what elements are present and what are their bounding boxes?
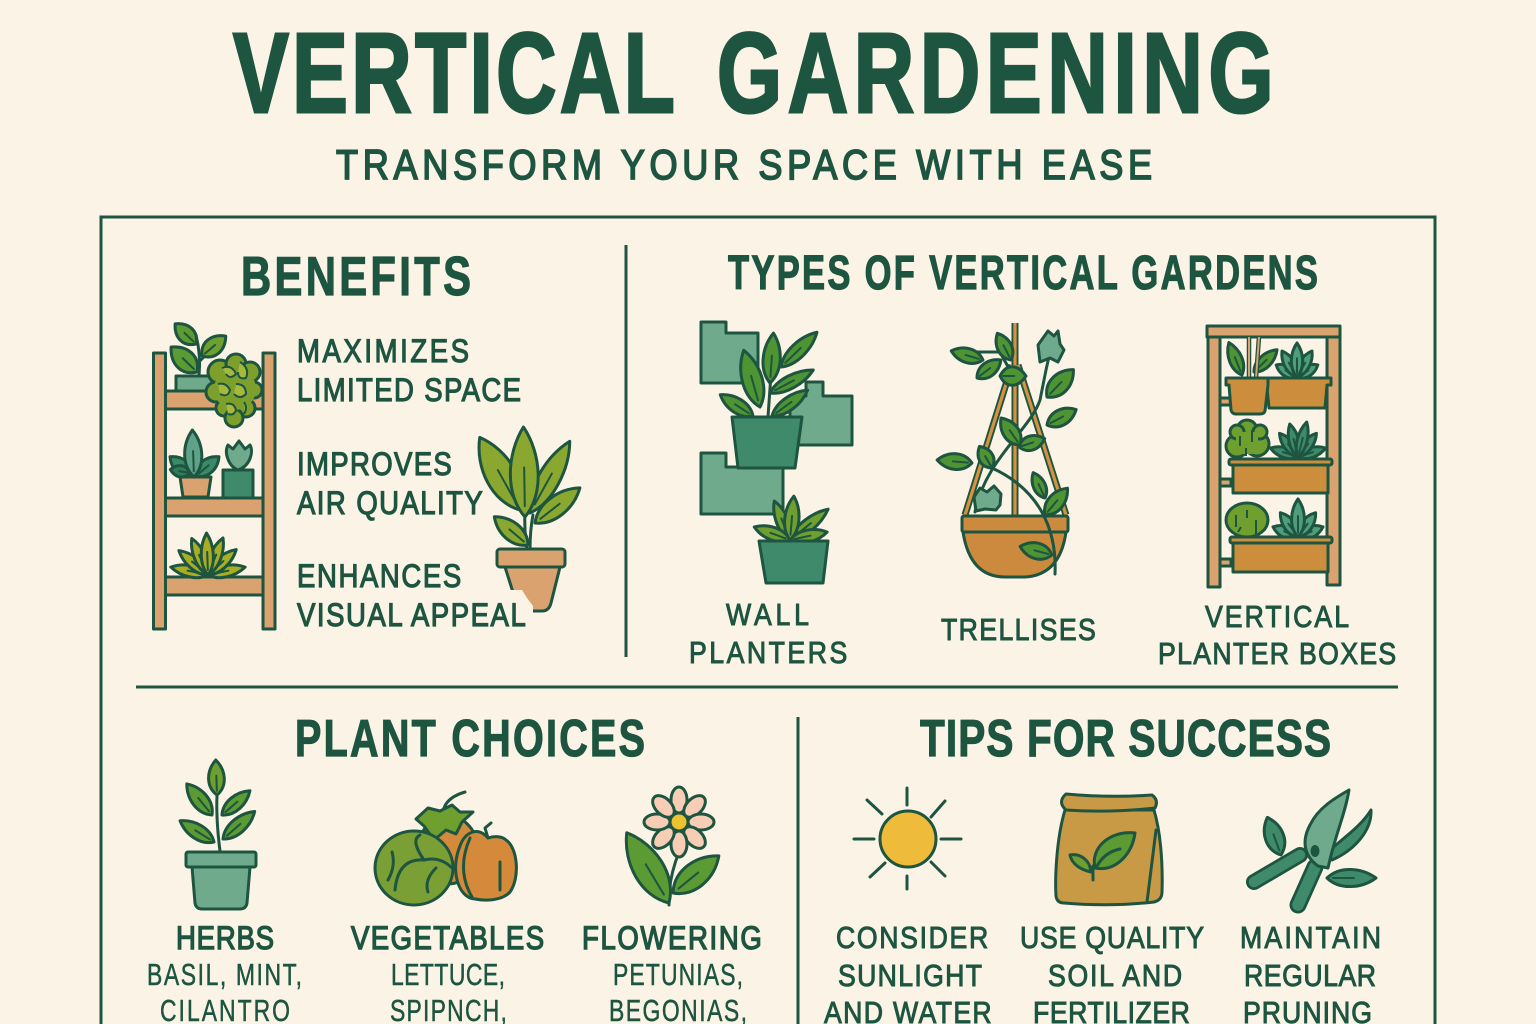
panel: types of vertical gardens (689, 245, 1396, 672)
text: use quality soil and fertilizer: SOIL AND (1048, 959, 1182, 994)
text: use quality soil and fertilizer (1020, 921, 1204, 1024)
heading: benefits: BENEFITS (241, 247, 471, 307)
icon: soil bag (1056, 794, 1162, 905)
text: maximizes limited space: LIMITED SPACE (297, 373, 521, 409)
heading: plant choices: PLANT CHOICES (295, 709, 645, 767)
label: vertical planter boxes: VERTICAL (1205, 600, 1349, 635)
text: maximizes limited space: MAXIMIZES (297, 334, 469, 370)
text: use quality soil and fertilizer: USE QUALITY (1020, 921, 1204, 956)
text: enhances visual appeal (297, 559, 526, 634)
title: GARDENING (717, 11, 1273, 137)
icon: shelf with plants (154, 318, 275, 629)
title: VERTICAL (233, 11, 675, 137)
text: consider sunlight and water: CONSIDER (836, 921, 988, 956)
text: improves air quality (297, 447, 483, 522)
text: improves air quality: AIR QUALITY (297, 486, 483, 522)
heading: types: TYPES OF VERTICAL GARDENS (728, 245, 1318, 299)
text: maintain regular pruning (1240, 921, 1381, 1024)
text: flowering: FLOWERING (582, 921, 762, 957)
text: vegetables: LETTUCE, (391, 957, 505, 992)
heading: tips: TIPS FOR SUCCESS (920, 709, 1331, 767)
text: herbs (147, 921, 302, 1024)
text: consider sunlight and water: SUNLIGHT (838, 959, 982, 994)
subtitle: TRANSFORM YOUR SPACE WITH EASE (336, 143, 1152, 189)
text: enhances visual appeal: VISUAL APPEAL (297, 598, 526, 634)
icon: potted plant (467, 427, 586, 622)
text: improves air quality: IMPROVES (297, 447, 452, 483)
title (233, 11, 1273, 137)
panel: tips for success (824, 709, 1381, 1024)
label: vertical planter boxes: PLANTER BOXES (1158, 637, 1396, 672)
text: enhances visual appeal: ENHANCES (297, 559, 461, 595)
icon: pruning shears (1254, 790, 1376, 905)
text: maintain regular pruning: REGULAR (1244, 959, 1376, 994)
icon: herb pot (176, 760, 259, 909)
text: herbs: HERBS (176, 921, 274, 957)
text: flowering: PETUNIAS, (613, 957, 743, 992)
text: vegetables (351, 921, 544, 1024)
icon: sun (854, 788, 961, 889)
icon: flower (614, 787, 726, 911)
label: trellises: TRELLISES (941, 613, 1096, 648)
text: flowering (582, 921, 762, 1024)
panel: plant choices (147, 709, 762, 1024)
outer frame (101, 217, 1435, 1024)
text: consider sunlight and water (824, 921, 992, 1024)
icon: vertical planter boxes (1207, 326, 1340, 587)
label: vertical planter boxes (1158, 600, 1396, 672)
text: maintain regular pruning: MAINTAIN (1240, 921, 1381, 956)
label: wall planters: WALL (726, 598, 809, 633)
icon: trellis in hanging pot (936, 323, 1080, 577)
icon: wall planters (701, 322, 852, 583)
icon: vegetables (375, 792, 516, 905)
label: wall planters (689, 598, 847, 671)
text: maximizes limited space (297, 334, 521, 409)
text: herbs: BASIL, MINT, (147, 957, 302, 992)
text: vegetables: VEGETABLES (351, 921, 544, 957)
label: wall planters: PLANTERS (689, 636, 847, 671)
panel: benefits (154, 247, 586, 634)
